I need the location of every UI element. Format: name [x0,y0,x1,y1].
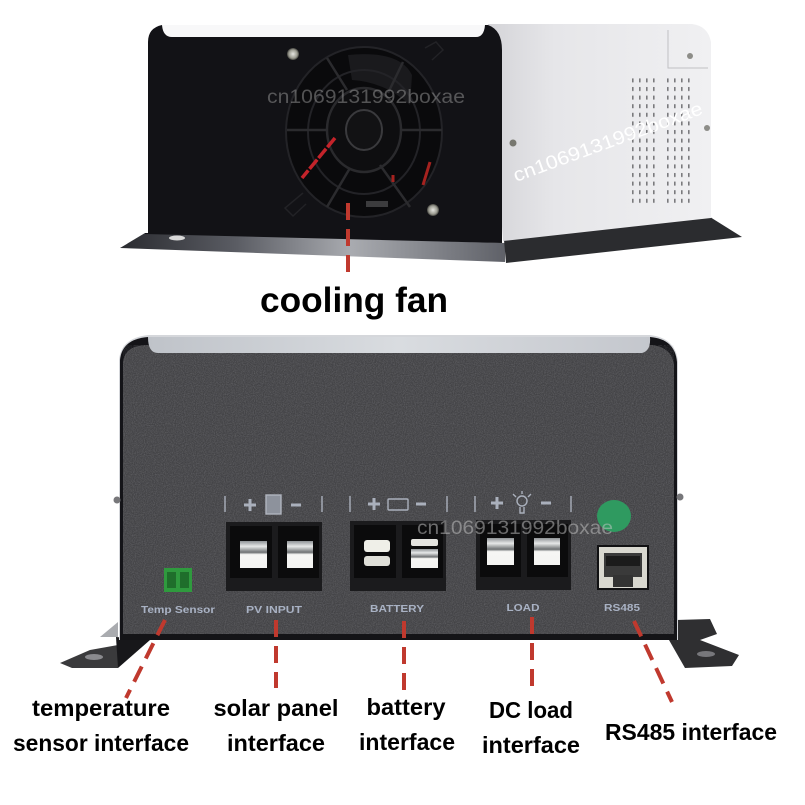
silk label: PV INPUT: PV INPUT [246,605,302,616]
label: battery interface: battery [366,694,446,720]
label: battery interface: interface [359,729,455,755]
leader line: RS485 [634,621,672,702]
watermark: cn1069131992boxae [417,518,613,539]
panel labels: polarity icons [225,491,571,514]
icon: cooling fan [285,42,443,217]
label: DC load interface: interface [482,732,580,758]
leader line: solar panel [274,620,278,688]
enclosure [114,335,684,640]
front panel [145,25,502,243]
panel: top view of controller with cooling fan [120,24,742,320]
mounting flange and underside [120,217,742,263]
silk label: BATTERY: BATTERY [370,604,424,615]
leader line: DC load [530,617,534,686]
panel: rear view of controller with interfaces [13,335,777,758]
leader line: cooling fan [346,203,350,280]
label: battery interface [359,694,455,755]
connector: PV input terminals [226,522,322,591]
label: DC load interface [482,697,580,758]
connector: RS485 port [597,545,649,590]
label: solar panel interface [214,695,338,756]
leader line: temperature sensor [126,620,165,698]
side panel with vent holes [488,24,711,241]
leader line: battery [402,621,406,690]
icon: fan screws [287,48,439,216]
silk label: LOAD: LOAD [506,603,540,614]
connector: temperature sensor [164,568,192,592]
icon: green sticker [597,500,631,532]
connector: load terminals [476,520,571,590]
label: temperature sensor interface [13,695,189,756]
label: temperature sensor interface: sensor interface [13,730,189,756]
label: DC load interface: DC load [489,697,573,723]
label: solar panel interface: solar panel [214,695,338,721]
label: solar panel interface: interface [227,730,325,756]
watermark on side panel: cn1069131992boxae [511,99,706,187]
connector: battery terminals [350,521,446,591]
label: RS485 interface: RS485 interface [605,719,777,745]
watermark: cn1069131992boxae [267,87,465,108]
label: temperature sensor interface: temperature [32,695,170,721]
silk label: RS485: RS485 [604,603,641,614]
label: cooling fan: cooling fan [260,281,448,320]
mounting flanges [60,619,739,668]
silk label: Temp Sensor: Temp Sensor [141,605,215,616]
